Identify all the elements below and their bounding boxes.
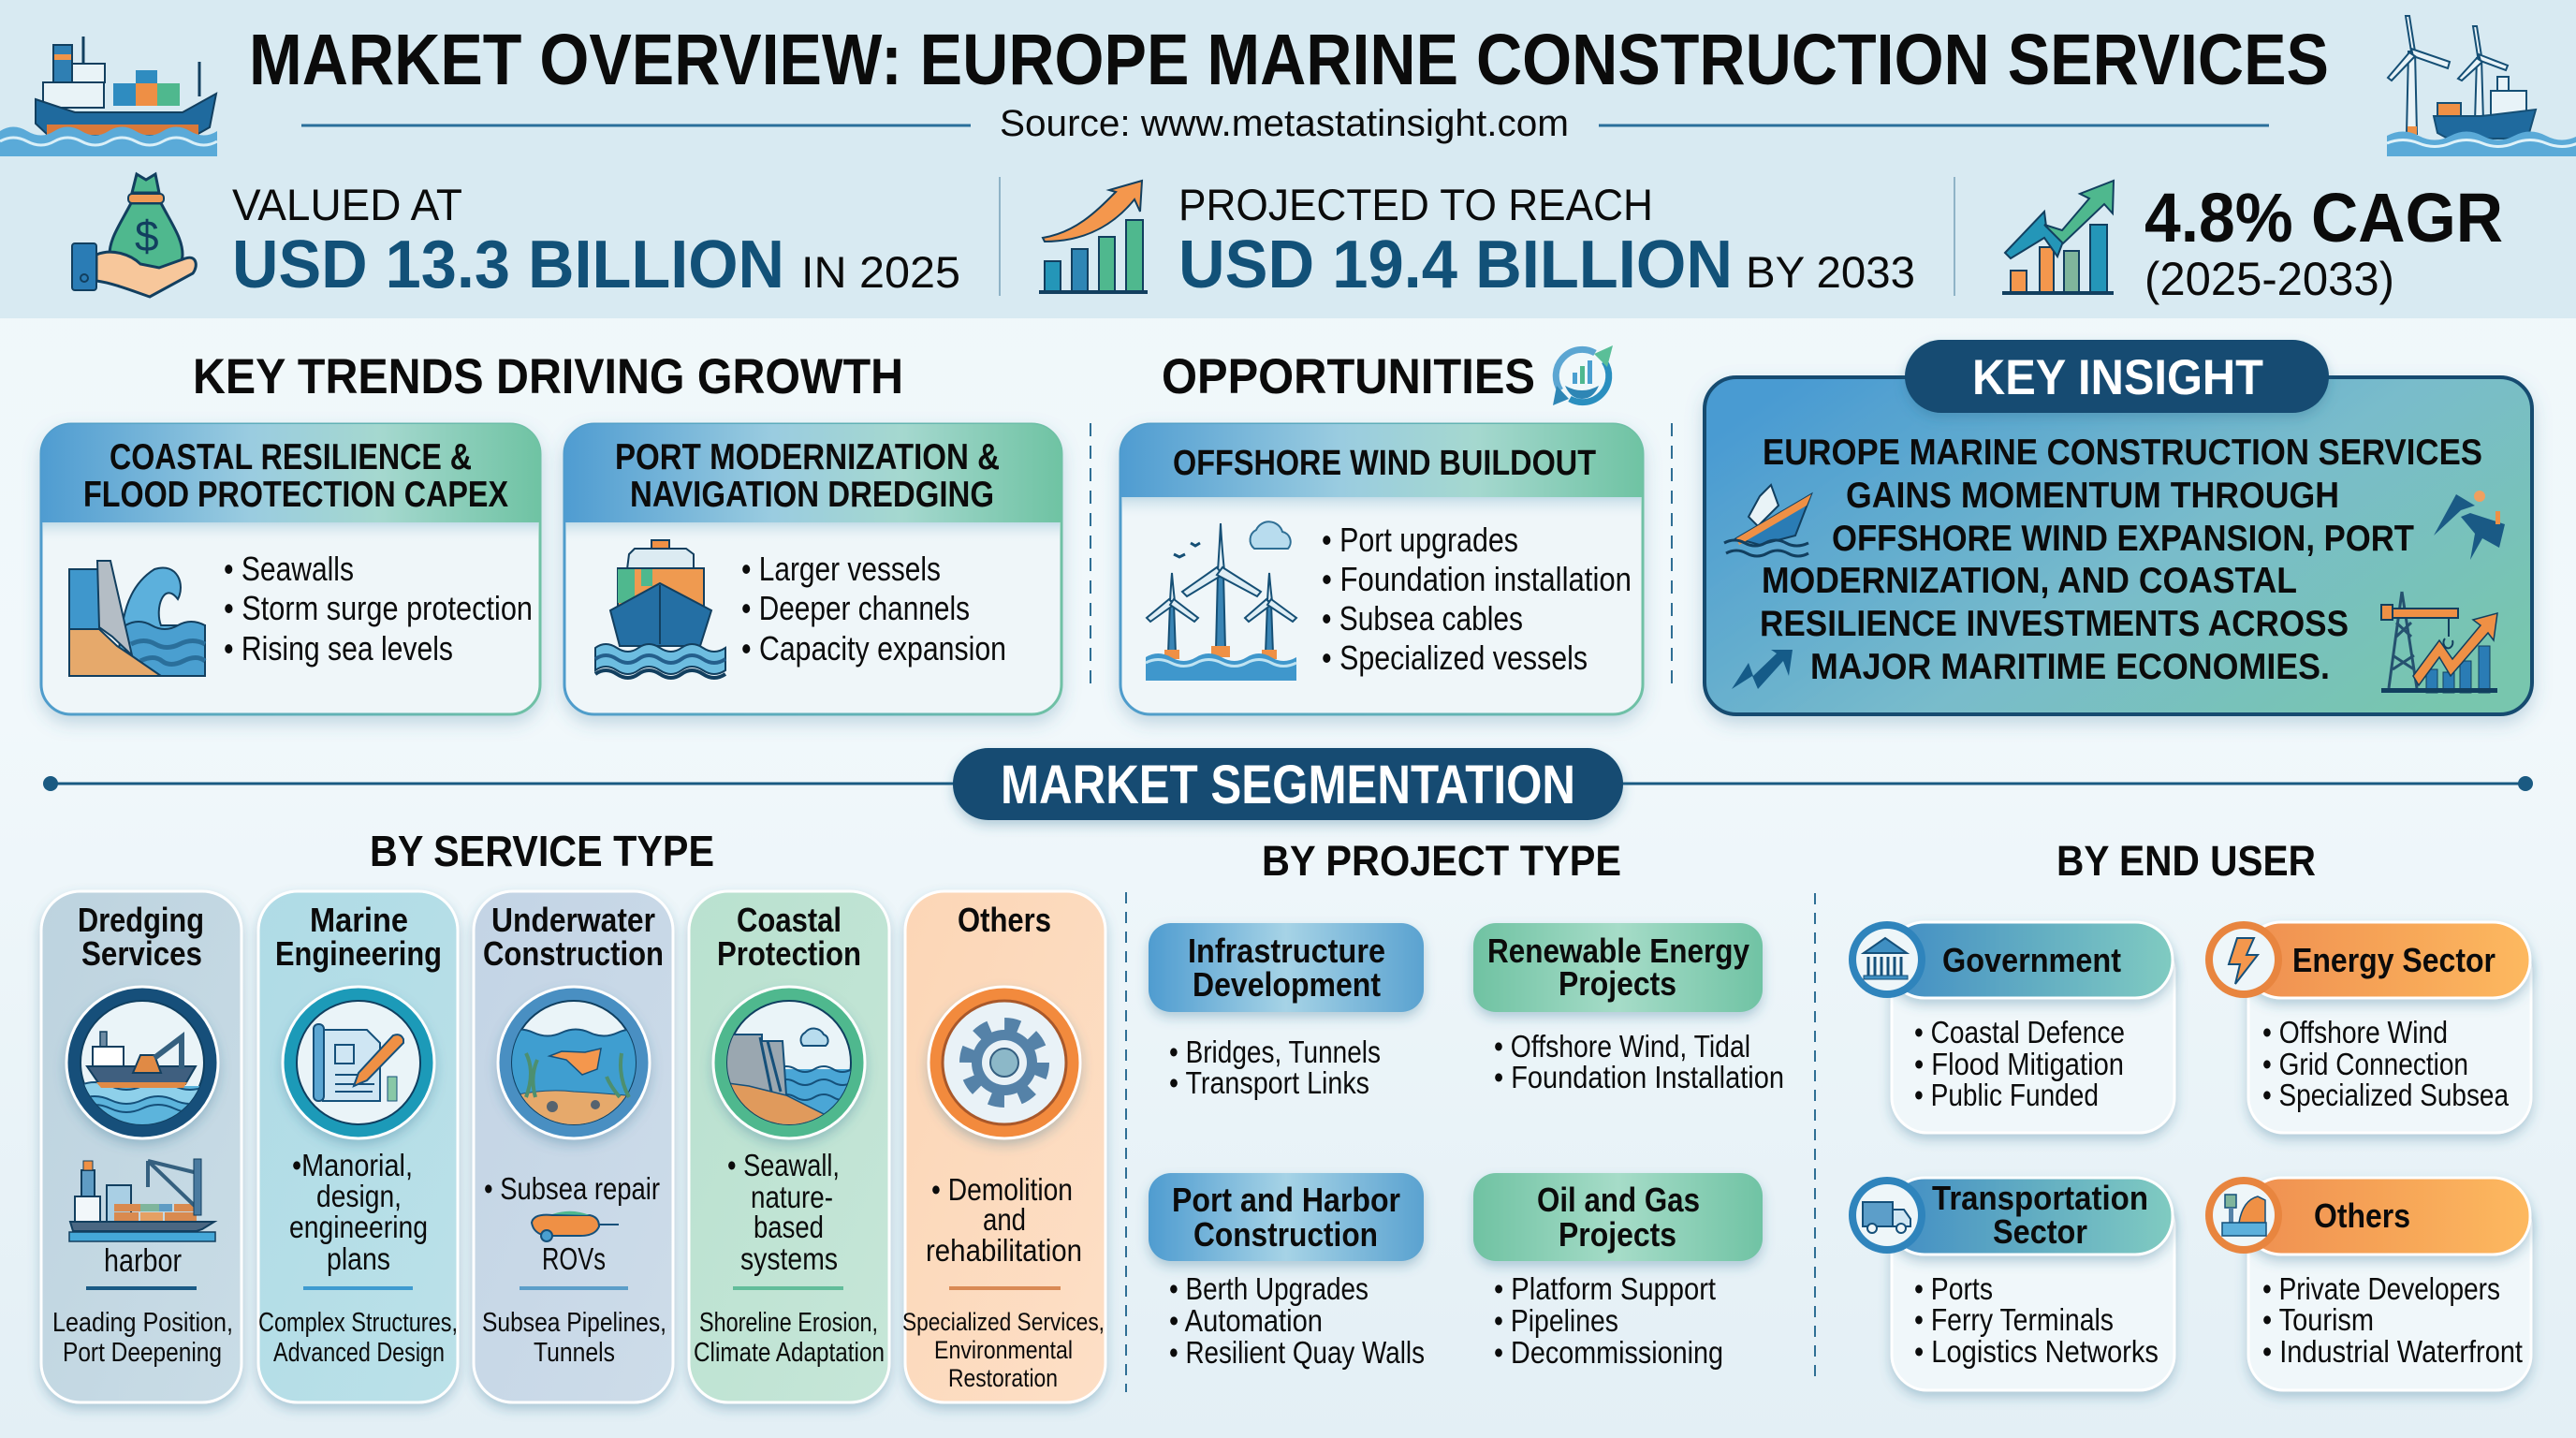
- card: other services: [902, 891, 1105, 1402]
- card title: [78, 901, 204, 973]
- icon: cargo ship on waves: [0, 37, 217, 156]
- card title: Construction: [483, 934, 664, 973]
- label: by 2033: BY 2033: [1746, 247, 1915, 297]
- bullet list: • Foundation installation: [1322, 560, 1632, 598]
- card description: Shoreline Erosion,: [699, 1308, 878, 1338]
- icon: seawall coast in ring: [713, 987, 865, 1138]
- icon: leaping figure: [2434, 491, 2505, 560]
- icon: tilted ship: [1724, 485, 1811, 556]
- service detail: [926, 1172, 1082, 1268]
- bullet list: • Industrial Waterfront: [2262, 1334, 2523, 1369]
- insight statement: EUROPE MARINE CONSTRUCTION SERVICES: [1763, 433, 2482, 473]
- project badge: Port and Harbor: [1172, 1181, 1400, 1219]
- bullet list: • Ports: [1914, 1271, 1993, 1306]
- heading: by project type: BY PROJECT TYPE: [1262, 837, 1621, 885]
- service detail: design,: [316, 1179, 402, 1213]
- card: marine engineering: [258, 891, 458, 1402]
- bullet list: • Flood Mitigation: [1914, 1047, 2124, 1081]
- service detail: plans: [327, 1241, 390, 1276]
- card description: Port Deepening: [63, 1338, 222, 1368]
- project badge: Projects: [1559, 1215, 1676, 1254]
- insight statement: [1760, 433, 2482, 687]
- end user: energy sector: [2205, 921, 2531, 1133]
- bullet list: • Foundation Installation: [1494, 1060, 1784, 1094]
- bullet list: • Transport Links: [1169, 1065, 1369, 1100]
- card heading: FLOOD PROTECTION CAPEX: [83, 475, 508, 515]
- card description: [258, 1308, 458, 1368]
- card description: Advanced Design: [273, 1338, 445, 1368]
- project badge: Development: [1193, 965, 1381, 1004]
- card description: Complex Structures,: [258, 1308, 458, 1338]
- bullet list: • Bridges, Tunnels: [1169, 1034, 1381, 1069]
- label: ROVs: ROVs: [542, 1241, 606, 1276]
- card heading: [615, 437, 1000, 515]
- label: valued at: VALUED AT: [232, 180, 462, 229]
- bullet list: • Specialized Subsea: [2262, 1078, 2510, 1112]
- key insight badge: [1905, 340, 2329, 413]
- bullet list: [2262, 1015, 2510, 1112]
- bullet list: • Offshore Wind: [2262, 1015, 2448, 1049]
- bullet list: • Seawalls: [224, 550, 354, 588]
- service detail: [289, 1148, 428, 1276]
- value: 4.8% CAGR: 4.8% CAGR: [2144, 179, 2503, 257]
- card: coastal protection: [689, 891, 889, 1402]
- service detail: • Seawall,: [727, 1148, 840, 1182]
- icon: seawall and wave: [69, 561, 205, 676]
- card heading: PORT MODERNIZATION &: [615, 437, 1000, 477]
- bullet list: • Public Funded: [1914, 1078, 2099, 1112]
- service detail: engineering: [289, 1210, 428, 1244]
- icon: bar chart with rising arrow: [1039, 181, 1148, 292]
- label: projected to reach: PROJECTED TO REACH: [1178, 180, 1653, 229]
- icon: hand holding money bag: [72, 174, 196, 297]
- card title: Underwater: [491, 901, 655, 939]
- icon: blueprint and pencil in ring: [283, 987, 434, 1138]
- card heading: [83, 437, 508, 515]
- value: USD 19.4 billion: USD 19.4 BILLION: [1178, 227, 1733, 302]
- stat: projected value 2033: [1039, 180, 1915, 302]
- bullet list: • Platform Support: [1494, 1271, 1716, 1306]
- card description: [902, 1308, 1105, 1392]
- header pill: [2244, 1178, 2530, 1255]
- section banner: market segmentation: MARKET SEGMENTATION: [1001, 755, 1575, 815]
- bullet list: • Port upgrades: [1322, 521, 1518, 559]
- project: infrastructure development: [1149, 923, 1424, 1100]
- card title: Services: [81, 934, 202, 973]
- icon: underwater scene in ring: [498, 987, 650, 1138]
- card title: Engineering: [275, 934, 442, 973]
- header pill: [2244, 922, 2530, 998]
- bullet list: • Specialized vessels: [1322, 638, 1588, 677]
- project: port and harbor: [1149, 1173, 1425, 1370]
- header pill: [1887, 922, 2173, 998]
- icon: offshore wind turbines: [1146, 521, 1296, 681]
- bullet list: [1914, 1271, 2159, 1369]
- label: harbor: harbor: [104, 1243, 182, 1279]
- insight statement: MODERNIZATION, AND COASTAL: [1762, 561, 2297, 601]
- service detail: • Demolition: [931, 1172, 1073, 1207]
- bullet list: • Ferry Terminals: [1914, 1302, 2114, 1337]
- bullet list: • Offshore Wind, Tidal: [1494, 1029, 1750, 1064]
- card title: [483, 901, 664, 973]
- service detail: [727, 1148, 840, 1276]
- bullet list: • Grid Connection: [2262, 1047, 2468, 1081]
- project badge: Construction: [1193, 1215, 1378, 1254]
- header banner: [0, 16, 2576, 156]
- heading: by end user: BY END USER: [2056, 837, 2316, 885]
- service detail: based: [754, 1210, 824, 1244]
- bullet list: • Tourism: [2262, 1302, 2374, 1337]
- service detail: systems: [740, 1241, 838, 1276]
- bullet list: [1169, 1034, 1381, 1100]
- card description: [694, 1308, 885, 1368]
- stat: market value 2025: [72, 174, 960, 302]
- card title: Coastal: [737, 901, 842, 939]
- card title: Marine: [310, 901, 408, 939]
- insight statement: OFFSHORE WIND EXPANSION, PORT: [1832, 519, 2414, 559]
- icon: ROV: [532, 1211, 619, 1241]
- icon: wind turbines and vessel: [2387, 16, 2576, 156]
- bullet list: • Capacity expansion: [741, 629, 1006, 668]
- card description: Tunnels: [534, 1338, 615, 1368]
- card title: [275, 901, 442, 973]
- bullet list: [1322, 521, 1632, 677]
- icon: lightning bolt: [2205, 921, 2282, 998]
- title: MARKET OVERVIEW: EUROPE MARINE CONSTRUCTION SERVICES: [249, 20, 2329, 100]
- project badge: [1149, 923, 1424, 1012]
- header pill: Transportation: [1932, 1179, 2148, 1217]
- bullet list: • Subsea cables: [1322, 599, 1523, 638]
- bullet list: • Resilient Quay Walls: [1169, 1335, 1425, 1370]
- bullet list: • Larger vessels: [741, 550, 941, 588]
- bullet list: • Pipelines: [1494, 1303, 1618, 1338]
- key insight badge: KEY INSIGHT: [1972, 350, 2263, 405]
- project: renewable energy: [1473, 923, 1784, 1094]
- insight statement: GAINS MOMENTUM THROUGH: [1846, 476, 2339, 516]
- bullet list: [1494, 1029, 1784, 1094]
- project badge: Renewable Energy: [1487, 932, 1749, 970]
- heading: key trends: KEY TRENDS DRIVING GROWTH: [193, 349, 903, 404]
- bullet list: [741, 550, 1006, 668]
- card description: Subsea Pipelines,: [482, 1308, 666, 1338]
- bullet list: • Coastal Defence: [1914, 1015, 2125, 1049]
- insight statement: MAJOR MARITIME ECONOMIES.: [1810, 647, 2330, 687]
- service detail: •Manorial,: [292, 1148, 413, 1182]
- card description: [52, 1308, 233, 1368]
- bullet list: • Private Developers: [2262, 1271, 2500, 1306]
- card title: Protection: [717, 934, 861, 973]
- header pill: Government: [1942, 941, 2121, 979]
- heading: by service type: BY SERVICE TYPE: [370, 827, 714, 875]
- card description: Restoration: [948, 1364, 1058, 1392]
- icon: waterfront development: [2205, 1177, 2282, 1254]
- bullet list: [1169, 1271, 1425, 1370]
- project: oil and gas: [1473, 1173, 1763, 1370]
- icon: container ship front view: [595, 540, 725, 678]
- project badge: Infrastructure: [1188, 932, 1385, 970]
- bullet list: [1914, 1015, 2125, 1112]
- icon: harbor vessel: [69, 1159, 215, 1241]
- icon: crane and rising chart: [2381, 592, 2497, 693]
- icon: trend arrow: [1732, 650, 1793, 689]
- section banner: market segmentation: [43, 748, 2533, 820]
- project badge: [1149, 1173, 1424, 1261]
- panel: offshore wind opportunity: [1120, 424, 1643, 714]
- card: underwater construction: [474, 891, 673, 1402]
- icon: dredger in ring: [66, 987, 218, 1138]
- bullet list: • Logistics Networks: [1914, 1334, 2159, 1369]
- card heading: NAVIGATION DREDGING: [630, 475, 994, 515]
- icon: growth chart with zigzag arrow: [2002, 181, 2114, 293]
- card description: [482, 1308, 666, 1368]
- heading: opportunities: OPPORTUNITIES: [1162, 349, 1535, 404]
- bullet list: [1494, 1271, 1723, 1370]
- header pill: [1887, 1178, 2173, 1255]
- service detail: and: [983, 1202, 1026, 1237]
- panel: coastal resilience trend: [41, 424, 540, 714]
- bullet list: • Storm surge protection: [224, 589, 533, 627]
- card title: Dredging: [78, 901, 204, 939]
- panel: key insight: [1705, 340, 2532, 714]
- label: in 2025: IN 2025: [801, 247, 960, 297]
- project badge: Oil and Gas: [1537, 1181, 1700, 1219]
- value: USD 13.3 billion: USD 13.3 BILLION: [232, 227, 784, 302]
- header pill: Sector: [1993, 1212, 2087, 1251]
- card title: [717, 901, 861, 973]
- header pill: Others: [2314, 1196, 2410, 1235]
- project badge: Projects: [1559, 964, 1676, 1003]
- panel: port modernization trend: [564, 424, 1061, 714]
- card heading: COASTAL RESILIENCE &: [110, 437, 472, 477]
- card description: Leading Position,: [52, 1308, 233, 1338]
- end user: government: [1849, 921, 2174, 1133]
- label: subsea repair: • Subsea repair: [484, 1171, 660, 1206]
- card: dredging services: [41, 891, 242, 1402]
- project badge: [1473, 923, 1763, 1012]
- icon: gear in ring: [929, 987, 1080, 1138]
- stat: CAGR: [2002, 179, 2503, 305]
- end user: transportation sector: [1849, 1177, 2174, 1390]
- bullet list: [2262, 1271, 2523, 1369]
- service detail: nature-: [751, 1180, 833, 1214]
- icon: opportunity growth cycle: [1553, 345, 1613, 405]
- bullet list: • Berth Upgrades: [1169, 1271, 1368, 1306]
- project badge: [1473, 1173, 1763, 1261]
- end user: others: [2205, 1177, 2531, 1390]
- bullet list: • Deeper channels: [741, 589, 970, 627]
- card description: Environmental: [934, 1336, 1073, 1364]
- card title: Others: [958, 901, 1051, 939]
- card description: Specialized Services,: [902, 1308, 1105, 1336]
- icon: government building: [1849, 921, 1925, 998]
- icon: delivery truck: [1849, 1177, 1925, 1254]
- card heading: OFFSHORE WIND BUILDOUT: [1173, 444, 1596, 483]
- service detail: rehabilitation: [926, 1233, 1082, 1268]
- header pill: Energy Sector: [2292, 941, 2496, 979]
- source line: Source: www.metastatinsight.com: [1000, 103, 1569, 144]
- label: 2025-2033: (2025-2033): [2144, 253, 2394, 305]
- bullet list: • Decommissioning: [1494, 1335, 1723, 1370]
- bullet list: • Rising sea levels: [224, 629, 453, 668]
- card description: Climate Adaptation: [694, 1338, 885, 1368]
- icon: hand holding money bag: $: [135, 212, 159, 260]
- insight statement: RESILIENCE INVESTMENTS ACROSS: [1760, 604, 2349, 644]
- bullet list: • Automation: [1169, 1303, 1323, 1338]
- bullet list: [224, 550, 533, 668]
